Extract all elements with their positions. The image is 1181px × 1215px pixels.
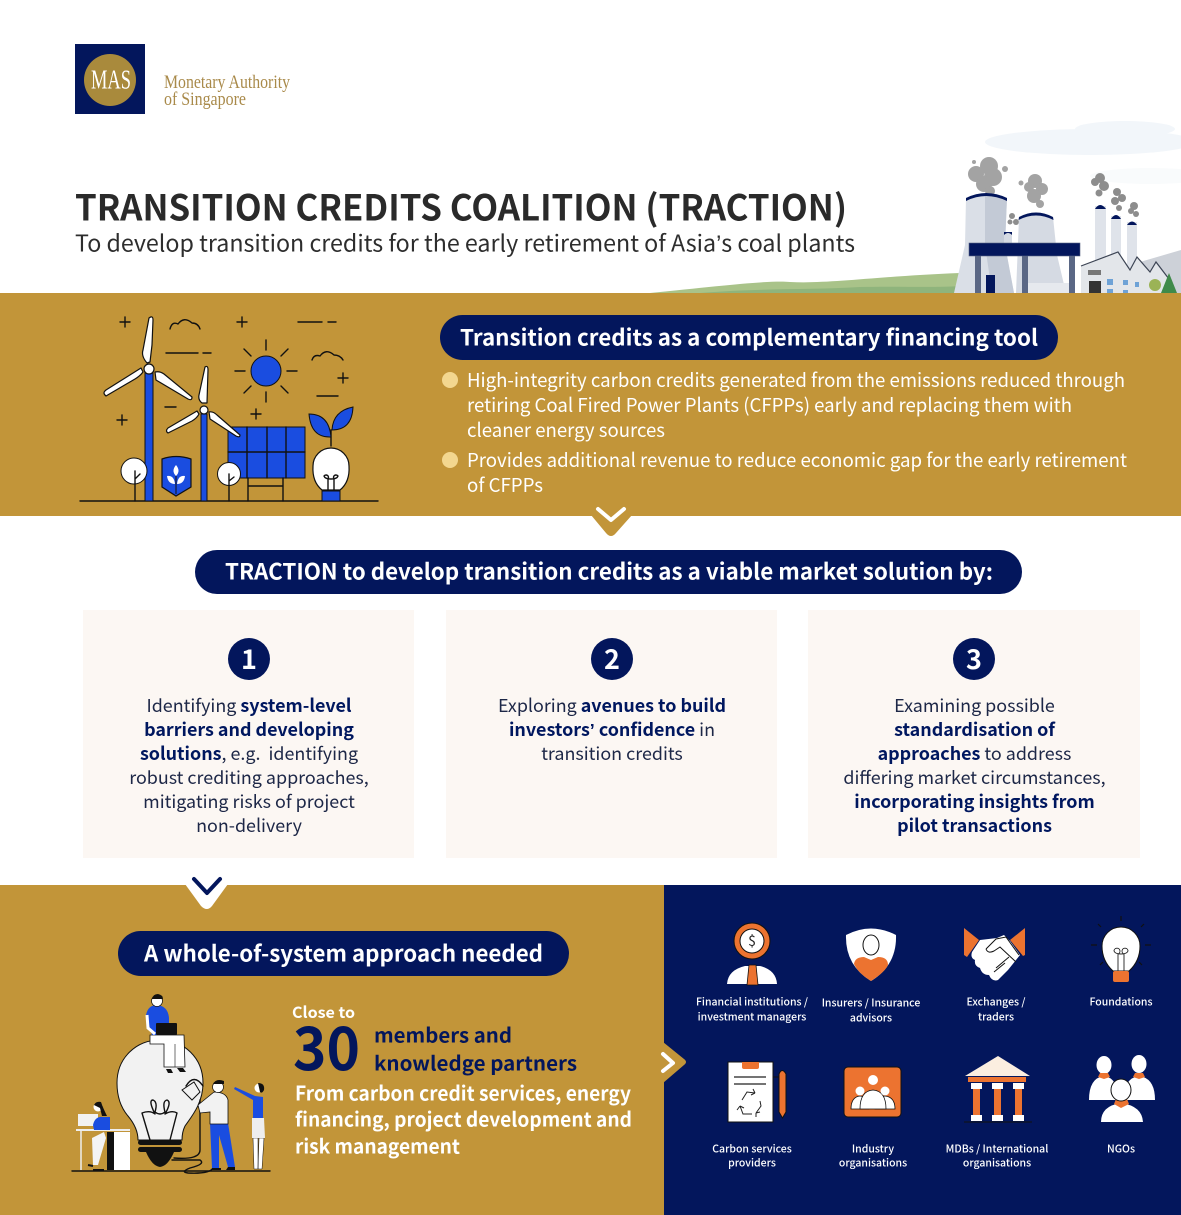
member: carbon services: providers (728, 1156, 776, 1170)
number badge 3: 3 (966, 638, 982, 677)
bullet list: of CFPPs (467, 471, 543, 498)
member: NGOs (1089, 1055, 1155, 1156)
bullet list: High-integrity carbon credits generated from the emissions reduced through (467, 366, 1125, 393)
card 2 text: Exploring avenues to build (498, 692, 726, 718)
card 3 text: approaches to address (878, 740, 1071, 766)
member: exchanges: Exchanges / (966, 994, 1026, 1010)
member: financial institutions (696, 923, 808, 1024)
heading pill: viable market solution: TRACTION to develop transition credits as a viable market solution by: (225, 554, 993, 586)
number badge 2 (591, 638, 633, 680)
card 3 text (843, 692, 1106, 838)
panel: member types (664, 885, 1181, 1215)
description text: From carbon credit services, energy (295, 1078, 631, 1106)
panel: card 1 (83, 610, 414, 858)
logo: Monetary Authority of Singapore (75, 44, 290, 114)
logo: Monetary Authority of Singapore: of Singapore (164, 89, 246, 110)
illustration: team around a giant light bulb (72, 994, 270, 1173)
card 3 text: differing market circumstances, (843, 764, 1106, 790)
woman pointing (234, 1083, 265, 1169)
member: financial institutions: investment managers (698, 1010, 806, 1024)
description text: risk management (295, 1130, 461, 1160)
icon: columned building (964, 1056, 1032, 1122)
member: industry organisations: Industry (852, 1142, 894, 1156)
panel: card 2 (446, 610, 777, 858)
panel: card 3 (808, 610, 1140, 858)
logo: Monetary Authority of Singapore: MAS (91, 64, 131, 94)
stat: close to 30 members and knowledge partners: Close to (292, 1001, 355, 1023)
illustration: coal power plant landscape (650, 121, 1181, 293)
icon: handshake (964, 928, 1025, 980)
arrow: right into member types (663, 1042, 686, 1083)
member: insurers: Insurers / Insurance (822, 996, 920, 1010)
card 2 text (498, 692, 726, 766)
heading pill: viable market solution (195, 550, 1022, 594)
member: exchanges: traders (978, 1010, 1014, 1024)
card 1 text: non-delivery (196, 812, 303, 838)
member: carbon services (712, 1062, 792, 1170)
bullet list: retiring Coal Fired Power Plants (CFPPs) early and replacing them with (467, 391, 1072, 418)
card 1 text (129, 692, 369, 838)
arrow: down from cards (185, 879, 228, 909)
number badge 1 (228, 638, 270, 680)
member: financial institutions: Financial institutions / (696, 994, 808, 1010)
icon: shield with person (846, 928, 896, 981)
member: carbon services: Carbon services (712, 1142, 792, 1156)
stat: close to 30 members and knowledge partners: knowledge partners (374, 1048, 577, 1076)
member: insurers (822, 928, 920, 1026)
panel: whole-of-system approach (0, 885, 664, 1215)
arrow: down from financing tool (591, 509, 632, 536)
member: MDBs: organisations (963, 1156, 1031, 1170)
stat: close to 30 members and knowledge partners: members and (374, 1020, 512, 1048)
description text: financing, project development and (295, 1104, 632, 1132)
card 3 text: pilot transactions (897, 812, 1052, 838)
member: industry organisations (839, 1067, 907, 1170)
card 1 text: Identifying system-level (146, 692, 352, 718)
heading pill: whole-of-system (118, 931, 569, 976)
icon: magnifier with dollar person: $ (748, 931, 756, 951)
member: foundations (1090, 916, 1152, 1010)
icon: clipboard with recycle symbol (728, 1062, 786, 1122)
number badge 1: 1 (241, 638, 257, 677)
card 2 text: investors’ confidence in (509, 716, 715, 742)
card 3 text: incorporating insights from (854, 788, 1095, 814)
heading pill: complementary financing tool: Transition credits as a complementary financing tool (460, 320, 1038, 352)
card 3 text: standardisation of (894, 716, 1056, 742)
member: insurers: advisors (850, 1010, 892, 1026)
heading pill: complementary financing tool (440, 315, 1058, 360)
icon: group in orange frame (844, 1067, 901, 1117)
illustration: wind turbines, solar panel and bulb (80, 317, 378, 501)
logo: Monetary Authority of Singapore: Monetary Authority (164, 72, 290, 93)
woman at desk (76, 1102, 130, 1170)
icon: three people (1089, 1055, 1155, 1122)
member: exchanges (964, 928, 1026, 1024)
member: foundations: Foundations (1090, 994, 1152, 1010)
member: industry organisations: organisations (839, 1156, 907, 1170)
number badge 2: 2 (604, 638, 620, 677)
panel: complementary financing tool (0, 293, 1181, 516)
bullet list: cleaner energy sources (467, 416, 665, 443)
person on top of the bulb (146, 994, 186, 1073)
bullet list (442, 366, 1127, 498)
icon: light bulb (1091, 916, 1151, 982)
member: MDBs: MDBs / International (946, 1142, 1048, 1156)
card 1 text: robust crediting approaches, (129, 764, 369, 790)
card 1 text: solutions, e.g. identifying (140, 740, 358, 766)
card 1 text: barriers and developing (144, 716, 354, 742)
bullet list: Provides additional revenue to reduce economic gap for the early retirement (467, 446, 1127, 473)
card 2 text: transition credits (541, 740, 683, 766)
stat: close to 30 members and knowledge partners: 30 (293, 1001, 360, 1088)
card 1 text: mitigating risks of project (143, 788, 355, 814)
member: MDBs (946, 1056, 1048, 1170)
card 3 text: Examining possible (894, 692, 1055, 718)
title: TRANSITION CREDITS COALITION (TRACTION) (75, 180, 847, 232)
description text (295, 1078, 632, 1160)
person plugging cable (182, 1080, 235, 1170)
number badge 3 (953, 638, 995, 680)
subtitle: To develop transition credits for the early retirement of Asia ’s coal plants (75, 224, 855, 258)
stat: close to 30 members and knowledge partners (292, 1001, 577, 1088)
member: NGOs: NGOs (1107, 1142, 1135, 1156)
heading pill: whole-of-system: A whole-of-system approach needed (143, 936, 543, 968)
